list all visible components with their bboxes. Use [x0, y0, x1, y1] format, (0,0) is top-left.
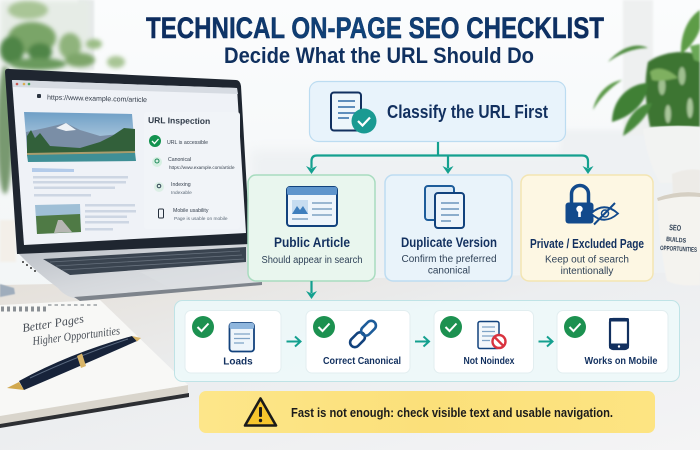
URL inspection panel	[144, 112, 240, 229]
laptop screen	[12, 80, 246, 245]
step: not noindex: Not Noindex	[464, 356, 515, 367]
step: works on mobile	[557, 310, 668, 373]
foliage	[593, 10, 700, 136]
main heading: TECHNICAL ON-PAGE SEO CHECKLIST	[146, 12, 604, 45]
step: not noindex	[434, 310, 534, 373]
subheading: Decide What the URL Should Do	[224, 43, 534, 68]
panel: duplicate version	[385, 175, 512, 281]
heading: public article: Public Article	[274, 235, 350, 250]
plant pot	[643, 126, 700, 183]
canonical row	[152, 157, 235, 170]
panel: classify the URL	[310, 82, 566, 142]
arrow: step 2 to 3	[415, 336, 429, 346]
callout text: Fast is not enough: check visible text and usable navigation.	[291, 405, 613, 420]
step: loads: Loads	[223, 356, 253, 368]
description: duplicate version: canonical	[428, 266, 470, 276]
canonical row: Canonical	[168, 157, 191, 163]
arrow: step 3 to 4	[538, 336, 552, 346]
step: correct canonical	[306, 310, 410, 373]
description: duplicate version	[401, 254, 497, 276]
heading: duplicate version: Duplicate Version	[401, 235, 497, 250]
step: correct canonical: Correct Canonical	[323, 356, 401, 367]
description: private page	[545, 254, 629, 277]
desk plant	[593, 10, 700, 183]
step: loads	[185, 310, 281, 373]
check: URL accessible: URL is accessible	[167, 140, 208, 146]
mug lettering: SEO	[669, 223, 681, 233]
description: private page: intentionally	[561, 266, 613, 277]
description: public article: Should appear in search	[262, 255, 362, 266]
arrow: step 1 to 2	[286, 336, 300, 346]
arrow: public article to checklist	[306, 281, 317, 299]
handwritten note: Higher Opportunities	[31, 323, 121, 348]
handwritten note: Better Pages	[21, 311, 85, 335]
notebook and pen	[0, 300, 189, 428]
icon: warning triangle	[245, 398, 276, 426]
mobile row: Page is usable on mobile	[174, 216, 228, 222]
canonical row: https://www.example.com/article	[169, 165, 235, 170]
indexing row	[154, 182, 192, 196]
spiral binding	[1, 306, 46, 312]
panel: checklist	[174, 300, 680, 382]
callout: warning banner	[199, 391, 655, 433]
heading: classify: Classify the URL First	[387, 101, 548, 122]
description: private page: Keep out of search	[545, 254, 629, 266]
icon: browser window	[287, 187, 337, 226]
laptop	[5, 69, 262, 301]
title	[146, 12, 604, 68]
indexing row: Indexable	[171, 190, 192, 196]
thumbnail photo	[35, 204, 81, 234]
mobile row: Mobile usability	[173, 208, 209, 214]
thumbnail text lines	[85, 204, 136, 230]
heading: private page: Private / Excluded Page	[530, 236, 644, 251]
icon: duplicate documents	[425, 186, 464, 228]
mug lettering: BUILDS	[666, 236, 687, 245]
pen	[7, 336, 141, 390]
hero photo	[24, 112, 136, 162]
laptop lid	[5, 69, 250, 254]
laptop base	[17, 243, 262, 299]
handwritten note	[21, 311, 121, 348]
URL inspection panel: URL Inspection	[148, 115, 210, 126]
step: works on mobile: Works on Mobile	[584, 356, 658, 367]
icon: lock with crossed eye	[566, 186, 618, 224]
indexing row: Indexing	[171, 182, 191, 188]
mobile row	[158, 208, 228, 222]
panel: private / excluded page	[521, 175, 653, 281]
mug lettering	[660, 223, 698, 254]
keyboard	[43, 247, 246, 275]
branching arrows	[306, 142, 594, 174]
icon: document with check	[331, 92, 376, 134]
coffee mugs	[657, 170, 700, 286]
address bar: https://www.example.com/article	[47, 95, 147, 104]
panel: public article	[248, 175, 375, 281]
description: duplicate version: Confirm the preferred	[401, 254, 497, 265]
article text lines	[32, 168, 128, 196]
